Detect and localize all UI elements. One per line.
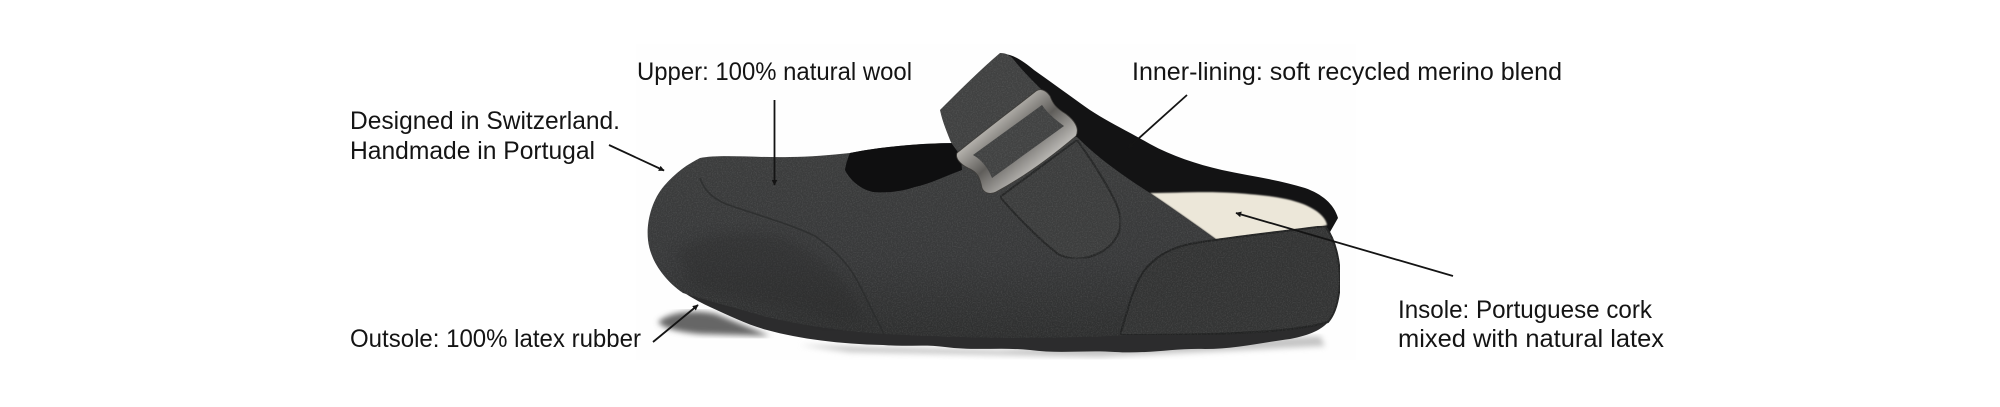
upper strap — [940, 53, 1042, 155]
label: outsole: Outsole: 100% latex rubber — [350, 325, 641, 353]
arrow: inner lining — [1128, 95, 1187, 148]
lower strap tab — [1000, 140, 1120, 258]
label: origin: Designed in Switzerland. — [350, 107, 620, 135]
label: insole: mixed with natural latex — [1398, 325, 1665, 353]
label: upper: Upper: 100% natural wool — [637, 58, 912, 86]
strap loop through buckle — [973, 105, 1064, 178]
arrow: insole — [1236, 213, 1453, 276]
toe opening — [845, 143, 962, 192]
ground shadow — [658, 312, 1325, 357]
label: inner lining: Inner-lining: soft recycled merino blend — [1132, 58, 1562, 86]
label: insole — [1398, 296, 1665, 353]
buckle — [957, 90, 1077, 193]
label: origin: Handmade in Portugal — [350, 137, 595, 165]
insole — [1150, 192, 1327, 240]
arrow: upper — [774, 100, 776, 185]
arrow: origin — [609, 145, 664, 170]
felt upper — [648, 137, 1340, 338]
label: origin — [350, 107, 620, 165]
heel counter — [1120, 226, 1340, 335]
photo backdrop — [636, 44, 1356, 360]
inner lining — [1003, 54, 1338, 246]
outsole — [668, 250, 1338, 352]
shoe illustration — [648, 53, 1340, 357]
toe cap seam — [700, 178, 884, 334]
label: insole: Insole: Portuguese cork — [1398, 296, 1652, 324]
toe shading — [676, 233, 865, 322]
arrow: outsole — [653, 305, 698, 342]
